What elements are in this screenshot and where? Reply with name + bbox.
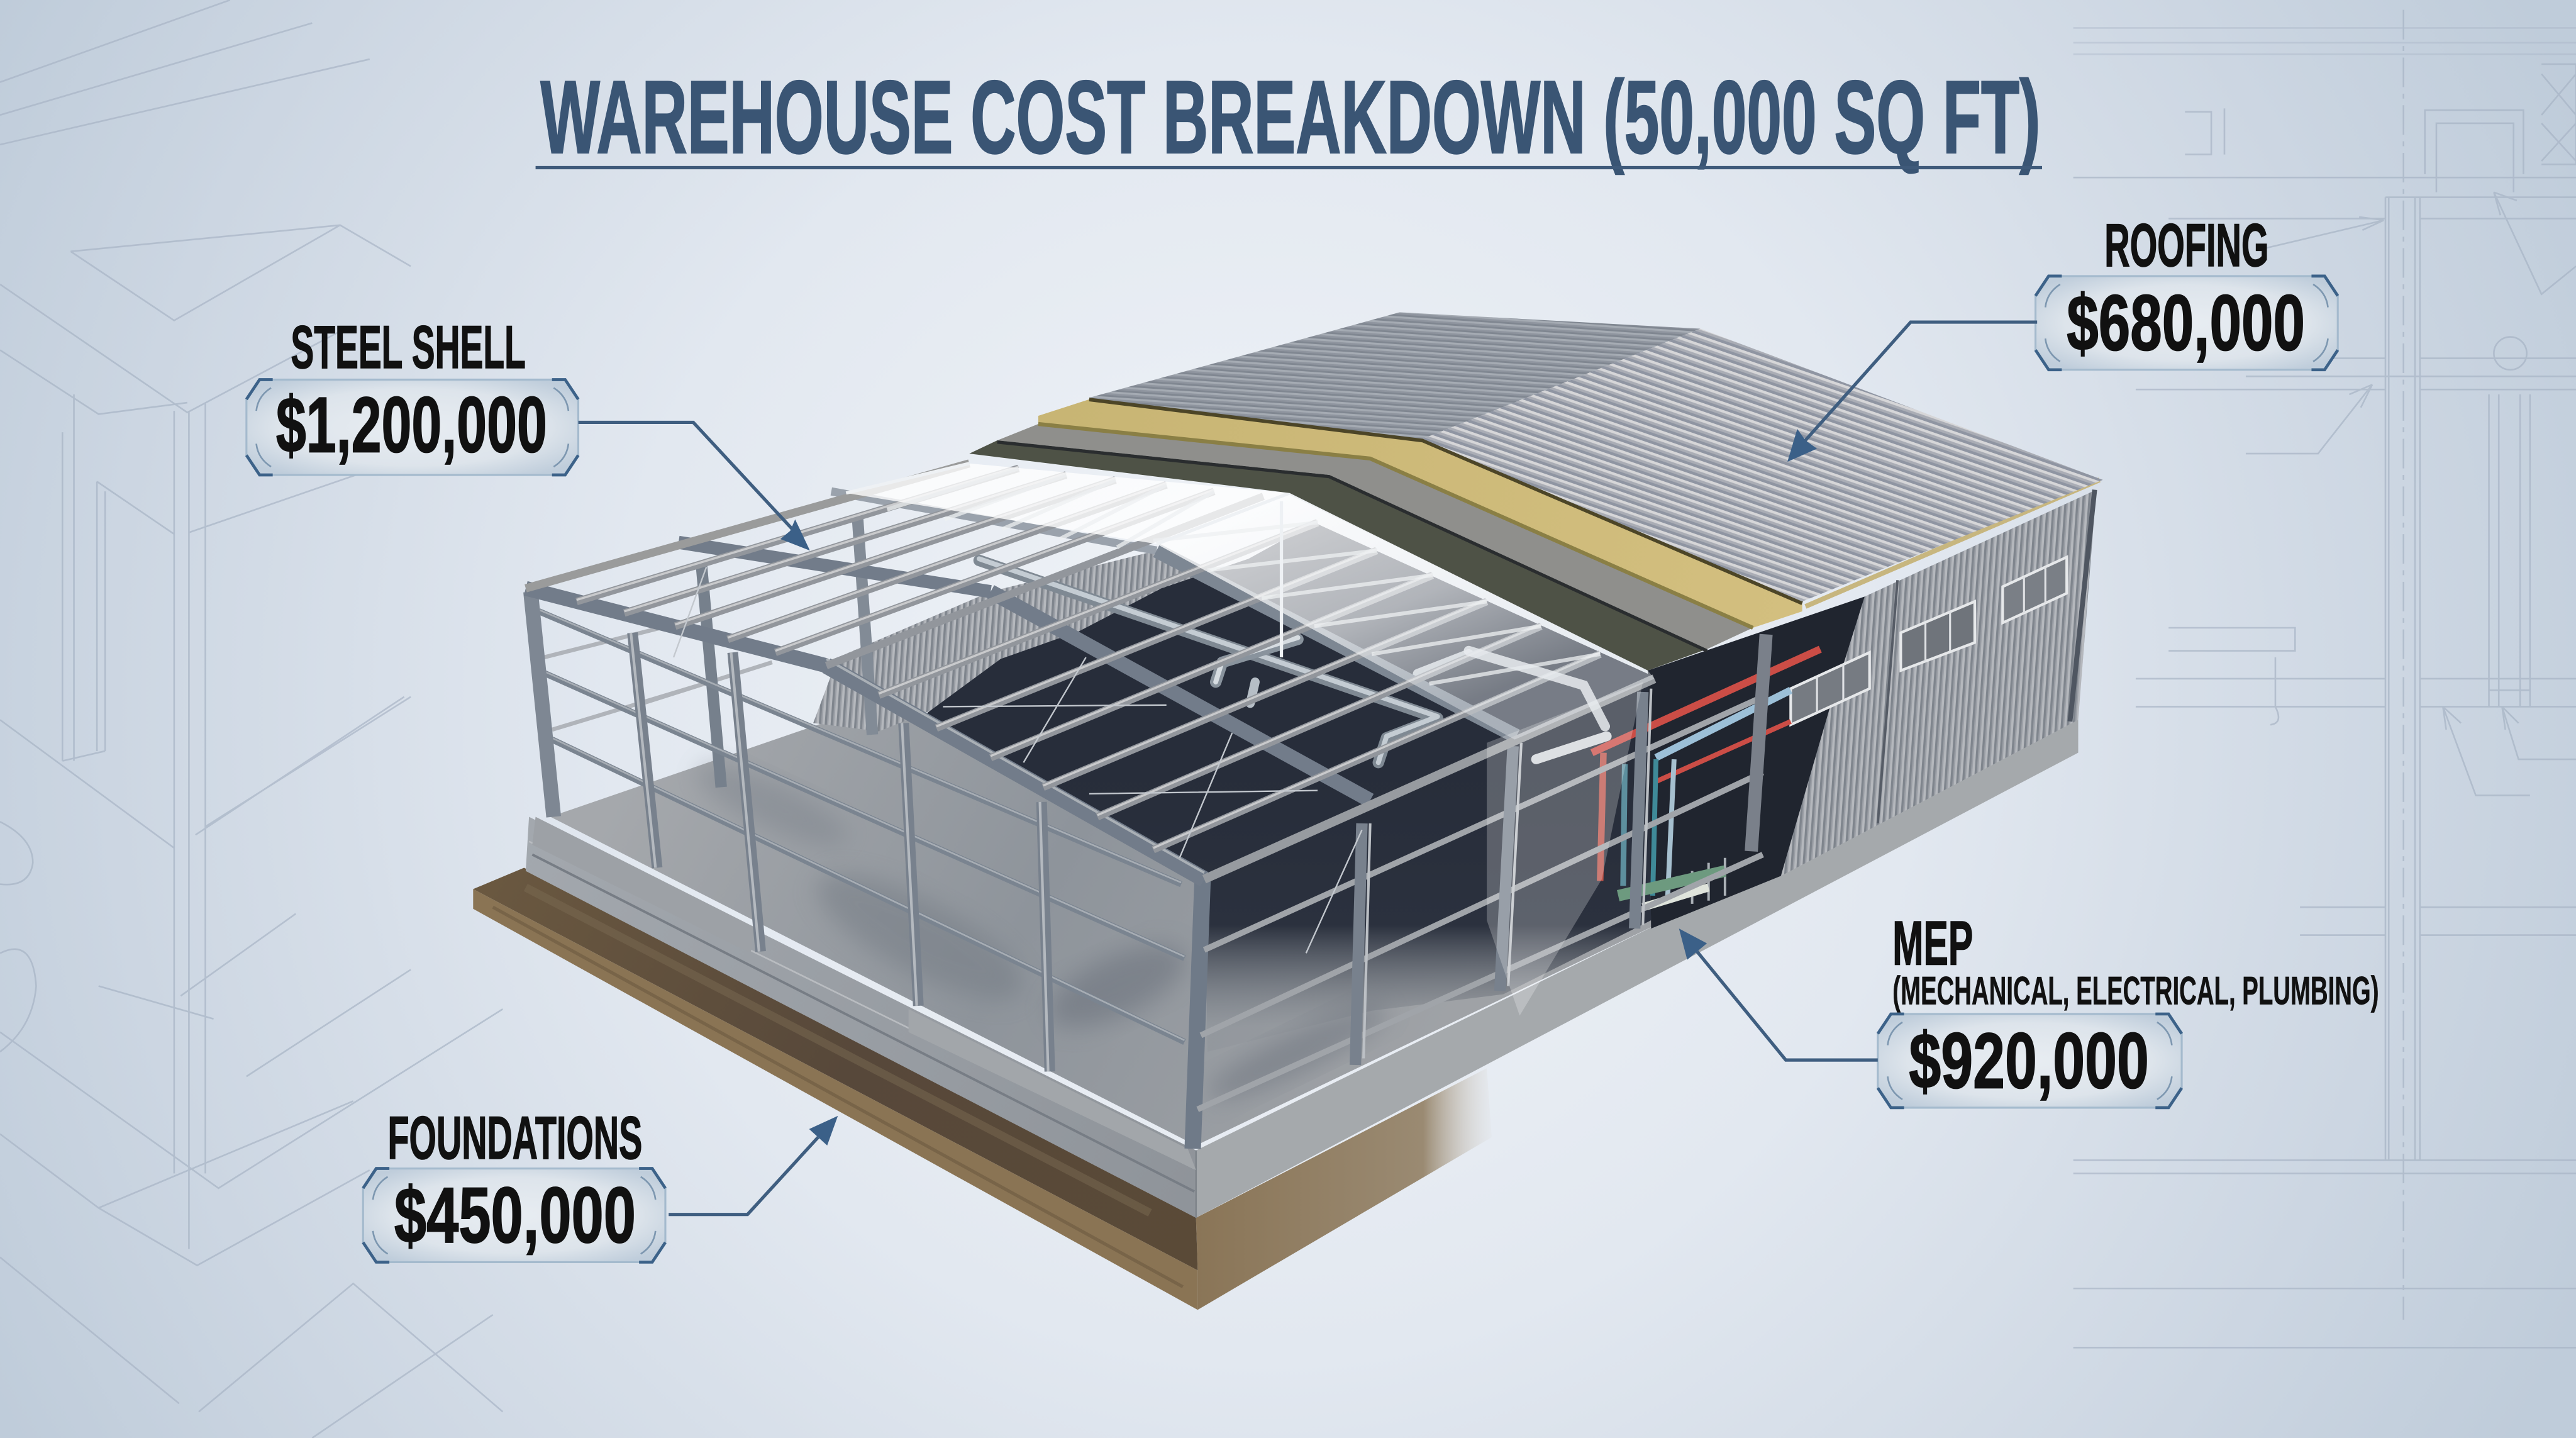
label: FOUNDATIONS [387,1105,642,1172]
roof metal panels: left plane [1089,312,1701,439]
concrete floor [550,710,1790,1145]
label: ROOFING [2104,212,2269,279]
roof metal panels: right plane [1423,329,2103,601]
value box [247,380,579,475]
arrow [579,422,810,550]
warehouse cutaway illustration [473,312,2103,1310]
value box: $1,200,000 [276,380,547,469]
roof purlins [526,464,1655,879]
blueprint sketch: right [2074,10,2576,1347]
window [2002,557,2067,623]
callout: foundations [363,1105,838,1262]
soil base [473,867,1492,1310]
clad end wall [1648,480,2099,928]
arrow [669,1116,838,1215]
window [1901,601,1975,671]
roof layer: waterproof membrane [969,440,1707,671]
concrete foundation slab [526,718,2078,1218]
glass roof panel [846,464,1655,1016]
arrow [1679,928,1878,1060]
back wall steel [544,518,872,787]
label: MEP [1892,909,1973,979]
value box: $450,000 [394,1171,636,1259]
window in cut section [1790,652,1870,725]
ventilation ducts [979,559,1607,762]
dark interior [920,523,1651,1052]
callout: steel shell [247,314,810,550]
back wall cladding [813,550,1314,732]
blueprint sketch: left [0,0,542,1438]
value box: $680,000 [2067,278,2305,367]
callout: roofing [1787,212,2338,462]
arrow [1787,322,2037,462]
label: STEEL SHELL [291,314,526,381]
value box: $920,000 [1909,1017,2149,1105]
steel frame: side wall [1197,634,1766,1109]
roof layer: insulation [1038,399,1802,628]
roof rafters [526,491,1516,879]
MEP pipes and equipment [1592,649,1820,907]
bracing wires [674,567,1362,953]
low concrete walls [532,817,1196,1170]
callout: MEP [1679,909,2379,1108]
steel frame: gable wall [531,592,1202,1149]
roof layer: concrete deck [997,424,1753,649]
